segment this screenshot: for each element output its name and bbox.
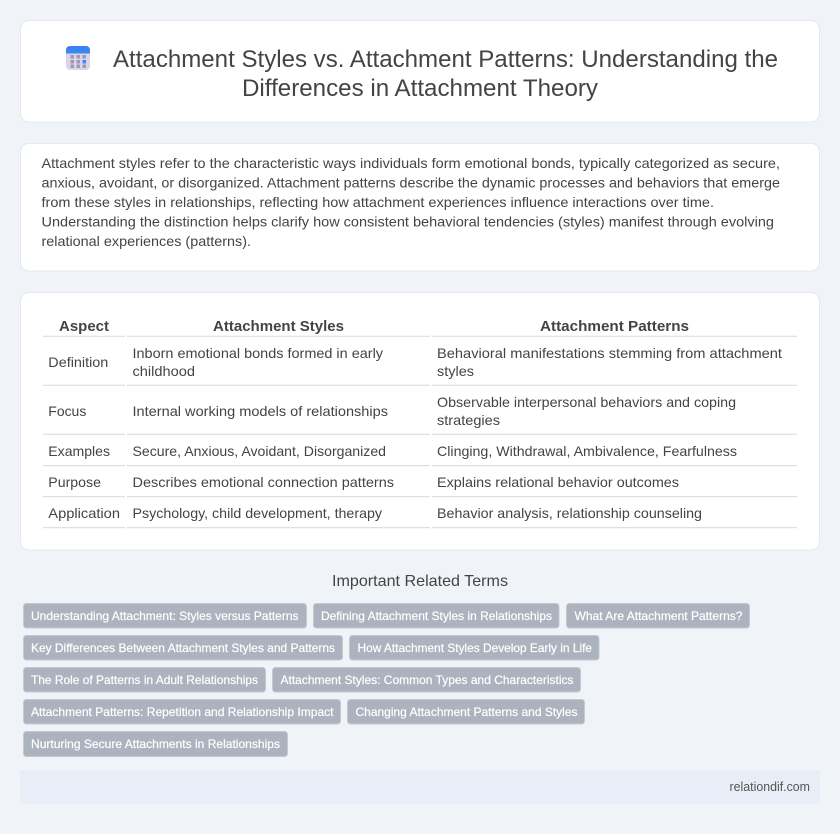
- tag: how styles develop: [350, 636, 599, 660]
- tag: key differences: Key Differences Between Attachment Styles and Patterns: [31, 641, 335, 655]
- panel: introduction: [20, 144, 820, 271]
- table row: definition: Definition: [48, 354, 108, 370]
- table row: examples: Clinging, Withdrawal, Ambivalence, Fearfulness: [437, 443, 737, 459]
- tag: key differences: [24, 636, 342, 660]
- table header row: Aspect: [59, 318, 109, 335]
- tag: understanding attachment: [24, 604, 306, 628]
- panel: header: [20, 20, 820, 122]
- tag: defining attachment styles: Defining Attachment Styles in Relationships: [321, 609, 552, 623]
- tag: what are attachment patterns: [566, 604, 750, 628]
- tag: common types: Attachment Styles: Common Types and Characteristics: [280, 673, 574, 687]
- text block: introduction paragraph: Attachment styles refer to the characteristic ways individuals form emotional bonds, typically categorized as secure,: [42, 155, 780, 171]
- tag: repetition and impact: [24, 700, 340, 724]
- footer: relationdif.com: [730, 780, 810, 794]
- table row: purpose: Describes emotional connection patterns: [132, 474, 394, 490]
- tag: role of patterns: [24, 668, 266, 692]
- tag: repetition and impact: Attachment Patterns: Repetition and Relationship Impact: [31, 705, 334, 719]
- table row: application: [48, 505, 702, 521]
- table row: purpose: Purpose: [48, 474, 101, 490]
- heading: important related terms: Important Related Terms: [332, 573, 508, 590]
- table row: definition: childhood: [132, 363, 195, 379]
- table row: examples: Examples: [48, 443, 110, 459]
- table row: focus: Internal working models of relationships: [132, 403, 388, 419]
- table row: focus: Observable interpersonal behaviors and coping: [437, 394, 736, 410]
- table row: purpose: Explains relational behavior outcomes: [437, 474, 679, 490]
- table row: focus: strategies: [437, 412, 500, 428]
- table row: examples: Secure, Anxious, Avoidant, Disorganized: [132, 443, 386, 459]
- table row: application: Psychology, child development, therapy: [132, 505, 382, 521]
- tag: nurturing secure attachments: [24, 732, 288, 756]
- table row: focus: Focus: [48, 403, 86, 419]
- icon: calendar: [66, 46, 90, 70]
- table row: definition: Inborn emotional bonds formed in early: [132, 345, 383, 361]
- table row: definition: [48, 345, 782, 379]
- footer: [20, 770, 820, 804]
- title: Differences in Attachment Theory: [242, 75, 598, 102]
- table header row: Attachment Patterns: [540, 318, 689, 335]
- title: [113, 46, 778, 102]
- table row: application: Behavior analysis, relationship counseling: [437, 505, 702, 521]
- tag: understanding attachment: Understanding Attachment: Styles versus Patterns: [31, 609, 298, 623]
- table row: definition: Behavioral manifestations stemming from attachment: [437, 345, 782, 361]
- text block: introduction paragraph: [42, 155, 780, 249]
- table row: definition: styles: [437, 363, 474, 379]
- table header row: [59, 318, 689, 335]
- tag: role of patterns: The Role of Patterns in Adult Relationships: [31, 673, 258, 687]
- tag: changing patterns: [348, 700, 584, 724]
- text block: introduction paragraph: Understanding the distinction helps clarify how consistent behavioral tendencies (styles) manifest through evolving: [42, 214, 774, 230]
- table row: examples: [48, 443, 737, 459]
- table row: focus: [48, 394, 736, 428]
- table row: application: Application: [48, 505, 120, 521]
- tag: changing patterns: Changing Attachment Patterns and Styles: [356, 705, 578, 719]
- tag: nurturing secure attachments: Nurturing Secure Attachments in Relationships: [31, 737, 280, 751]
- tag: common types: [272, 668, 580, 692]
- table header row: Attachment Styles: [213, 318, 344, 335]
- tag: what are attachment patterns: What Are Attachment Patterns?: [574, 609, 743, 623]
- text block: introduction paragraph: anxious, avoidant, or disorganized. Attachment patterns describe the dynamic processes and behaviors that emerge: [42, 174, 780, 190]
- tag: how styles develop: How Attachment Styles Develop Early in Life: [358, 641, 592, 655]
- table row: purpose: [48, 474, 679, 490]
- panel: comparison table: [20, 292, 820, 550]
- title: Attachment Styles vs. Attachment Patterns: Understanding the: [113, 46, 778, 73]
- tag: defining attachment styles: [314, 604, 559, 628]
- text block: introduction paragraph: from these styles in relationships, reflecting how attachment experiences influence interactions over time.: [42, 194, 714, 210]
- text block: introduction paragraph: relational experiences (patterns).: [42, 233, 251, 249]
- section: important related terms: [24, 573, 750, 756]
